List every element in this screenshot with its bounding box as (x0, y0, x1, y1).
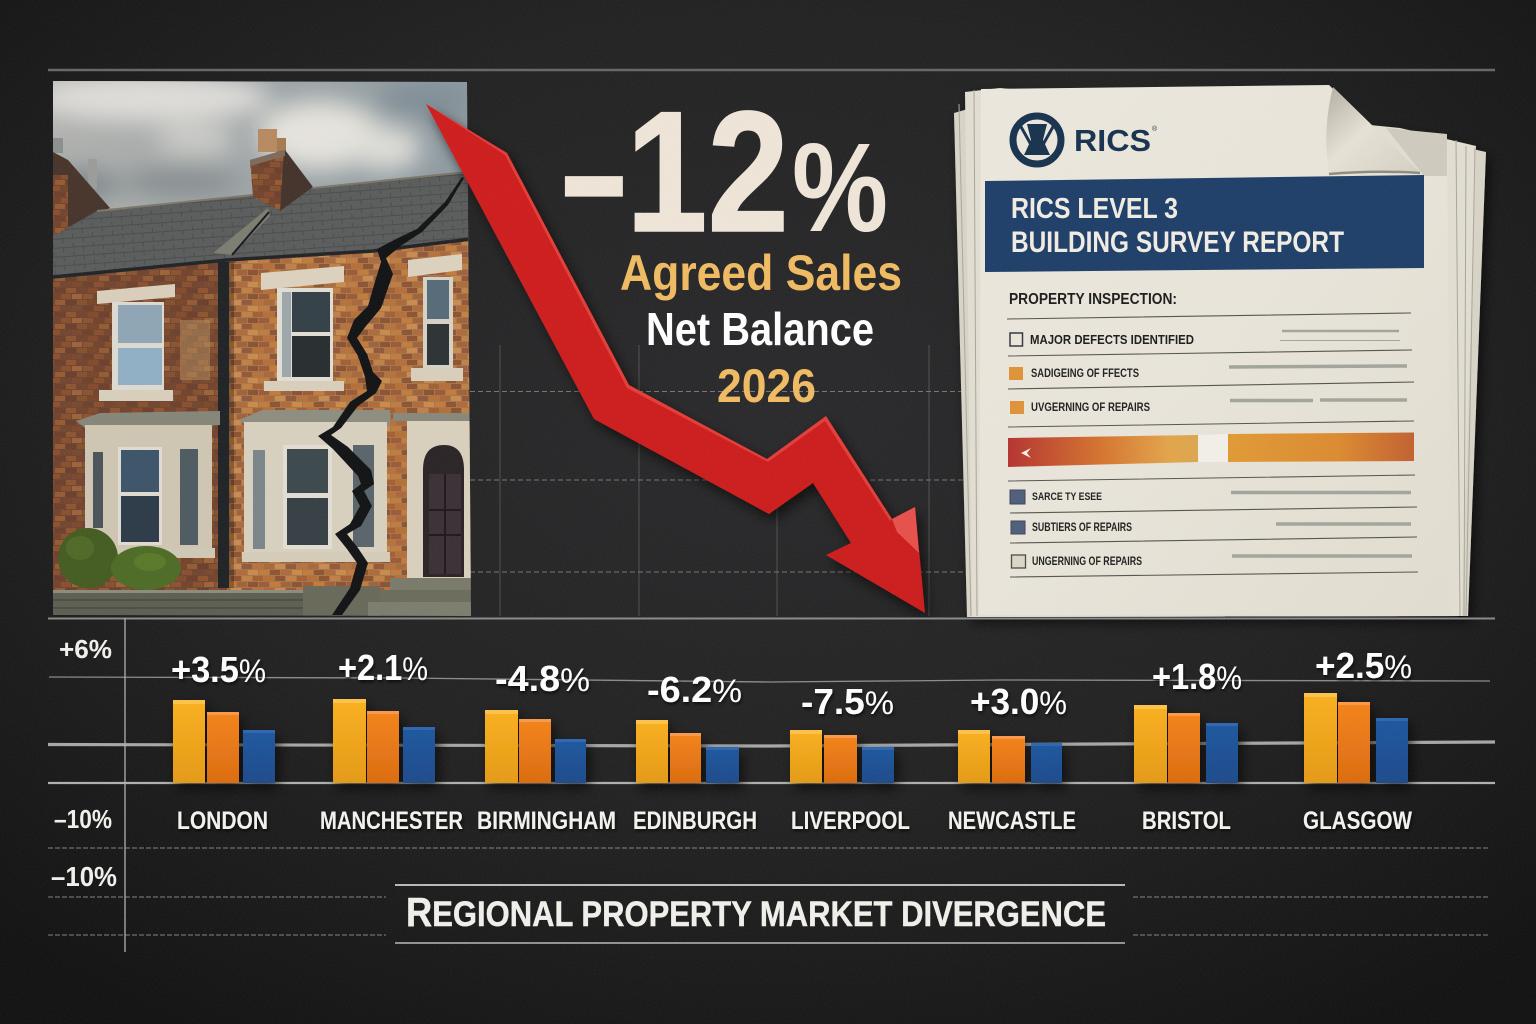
logo emblem (1013, 116, 1061, 164)
checklist row: neutral (1012, 554, 1412, 568)
headline figure (556, 76, 888, 268)
report title banner (985, 175, 1424, 272)
bars: Birmingham (485, 710, 586, 783)
bars: Newcastle (958, 730, 1062, 783)
checklist row: orange one: SADIGEING OF FFECTS (1031, 368, 1139, 380)
RICS logo: RICS (1074, 123, 1151, 158)
regional value labels: +3.0% (970, 681, 1067, 722)
back sheets of paper (954, 88, 1486, 617)
headline figure: - (556, 76, 632, 268)
city labels (177, 807, 1412, 835)
regional value labels: +3.5% (171, 649, 266, 690)
bars: Glasgow (1304, 693, 1408, 783)
main chimney (250, 129, 313, 211)
severity gradient bar (1008, 432, 1414, 467)
front door (393, 413, 471, 579)
headline caption (620, 245, 902, 412)
checklist row: orange two: UVGERNING OF REPAIRS (1031, 400, 1150, 414)
RICS logo: ® (1152, 125, 1158, 133)
property inspection heading: PROPERTY INSPECTION: (1009, 291, 1177, 308)
y-axis labels: –10% (54, 804, 112, 834)
city labels: LONDON (177, 807, 268, 835)
city labels: EDINBURGH (633, 807, 757, 835)
report title banner: RICS LEVEL 3 (1011, 193, 1178, 225)
checklist row: blue two (1011, 521, 1411, 534)
panel divider (48, 618, 1495, 620)
headline caption: Agreed Sales (620, 245, 902, 301)
bars: Bristol (1134, 705, 1238, 783)
upper windows (97, 254, 463, 401)
city labels: MANCHESTER (320, 807, 463, 835)
headline figure: % (792, 117, 888, 258)
regional value labels: -7.5% (801, 681, 894, 722)
checklist row: blue two: SUBTIERS OF REPAIRS (1032, 522, 1132, 534)
background grid behind arrow (470, 345, 965, 616)
city labels: NEWCASTLE (948, 807, 1076, 835)
checklist row: blue one (1010, 490, 1411, 504)
row rules (1007, 313, 1418, 577)
y-axis labels (51, 634, 117, 892)
city labels: LIVERPOOL (791, 807, 910, 835)
regional value labels: +2.5% (1315, 645, 1412, 686)
roof (53, 172, 471, 276)
sky with clouds (53, 81, 468, 276)
RICS logo (1013, 116, 1158, 164)
bars: London (173, 700, 275, 783)
regional value labels (171, 645, 1412, 722)
headline caption: Net Balance (646, 303, 874, 355)
city labels: GLASGOW (1303, 807, 1412, 835)
headline caption: 2026 (717, 359, 816, 412)
bay windows (76, 410, 390, 562)
front garden wall and steps (53, 578, 471, 616)
red falling arrow (426, 104, 925, 613)
y-axis labels: –10% (51, 861, 117, 892)
checklist row: blue one: SARCE TY ESEE (1032, 491, 1102, 503)
chart grid lines and axis (48, 618, 1495, 952)
left chimney (53, 138, 110, 236)
chart title: REGIONAL PROPERTY MARKET DIVERGENCE (406, 889, 1106, 935)
bars: Liverpool (790, 730, 894, 783)
panel: cracked terraced house photo (30, 74, 473, 616)
garden shrubs (58, 528, 181, 590)
city labels: BRISTOL (1142, 807, 1231, 835)
city labels: BIRMINGHAM (477, 807, 616, 835)
regional value labels: +2.1% (338, 647, 428, 688)
bars: Manchester (333, 699, 435, 783)
report title banner: BUILDING SURVEY REPORT (1011, 226, 1344, 259)
checklist row: major defects: MAJOR DEFECTS IDENTIFIED (1030, 332, 1194, 347)
regional value labels: -6.2% (647, 669, 742, 710)
top rule (48, 69, 1495, 71)
main sheet with folded corner (979, 85, 1451, 615)
checklist row: major defects (1010, 331, 1400, 347)
headline figure: 12 (626, 76, 789, 268)
checklist row: neutral: UNGERNING OF REPAIRS (1032, 554, 1142, 568)
bar chart: regional clusters (173, 693, 1408, 783)
brick walls (53, 238, 471, 590)
y-axis labels: +6% (59, 634, 112, 664)
checklist row: orange two (1010, 400, 1407, 414)
regional value labels: +1.8% (1152, 656, 1242, 697)
panel: RICS survey report document (954, 85, 1486, 617)
bars: Edinburgh (636, 720, 739, 783)
checklist row: orange one (1009, 366, 1407, 380)
regional value labels: -4.8% (495, 658, 590, 699)
structural crack (318, 177, 464, 615)
